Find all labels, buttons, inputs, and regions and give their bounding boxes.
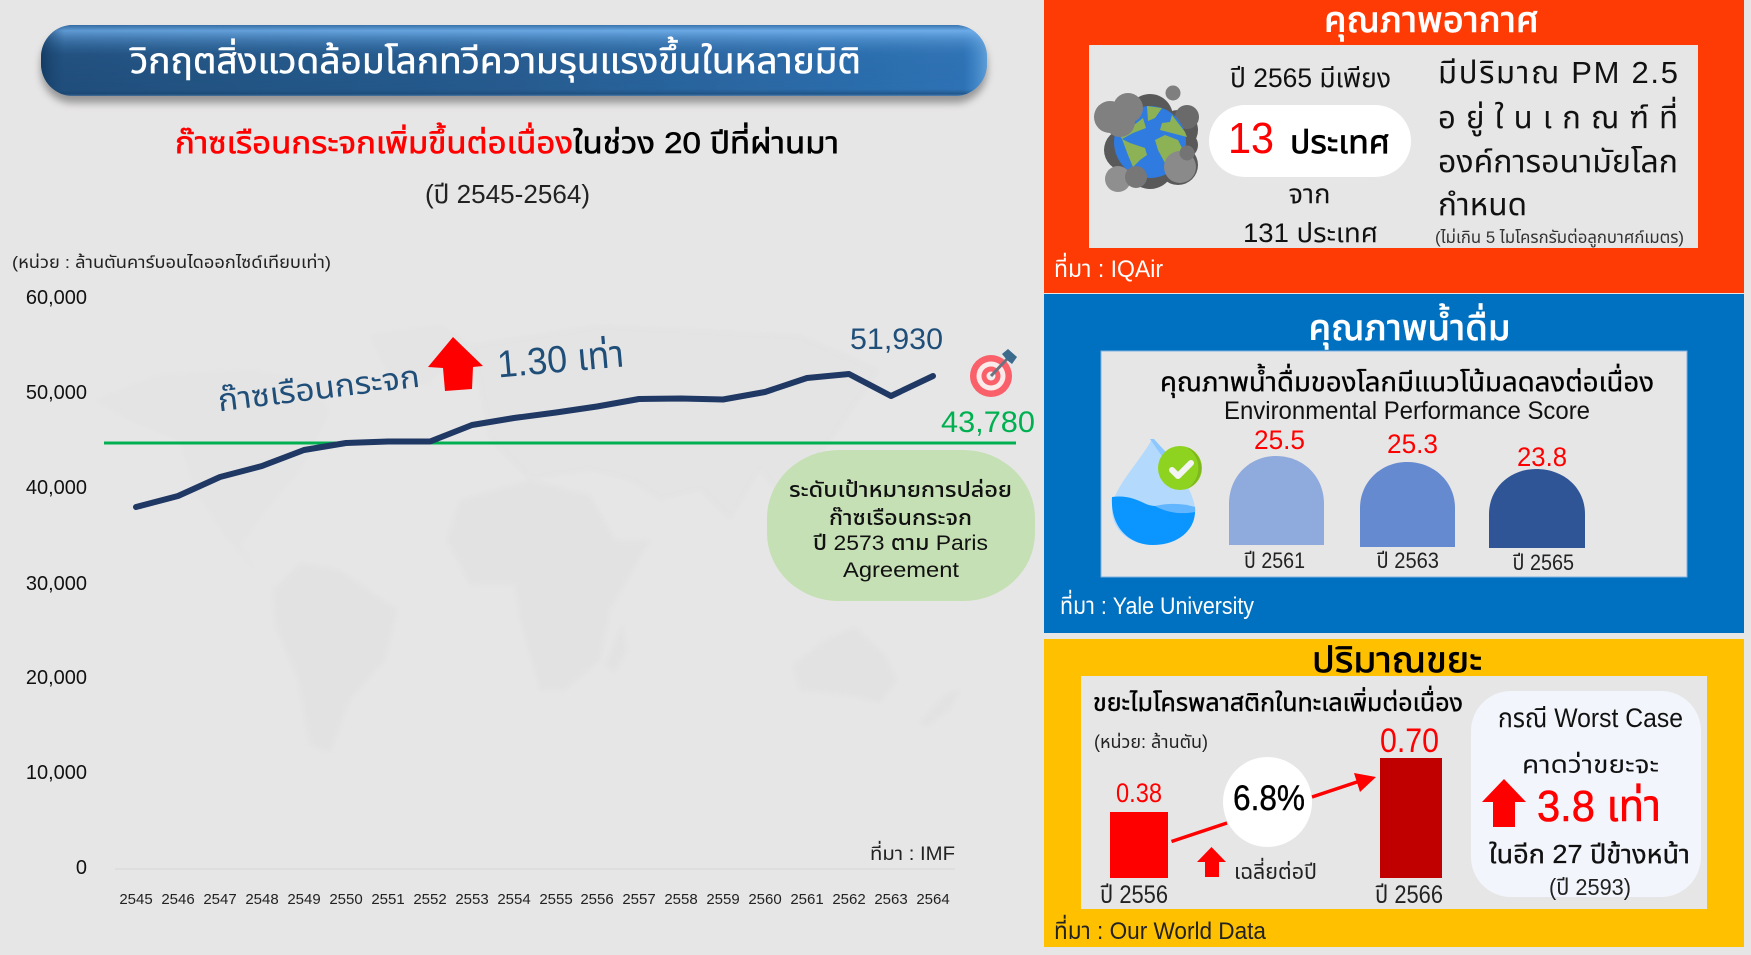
x axis labels: 2558 [664,891,698,908]
annotation: greenhouse gas 1.30 times: ก๊าซเรือนกระจก [216,359,422,418]
bar: 2556 [1100,778,1168,909]
bar: 2563: ปี 2563 [1376,548,1439,573]
text: PM 2.5 standard: มีปริมาณ PM 2.5 [1438,55,1678,90]
x axis labels: 2553 [455,891,489,908]
icon: red up arrow [428,337,483,391]
callout: target level [767,450,1035,601]
text: PM 2.5 standard: อยู่ในเกณฑ์ที่ [1438,96,1678,136]
text: average per year: เฉลี่ยต่อปี [1234,857,1317,884]
text: 13 of 131 countries: 131 ประเทศ [1243,218,1378,248]
x axis labels: 2548 [245,891,279,908]
emissions line [136,374,933,507]
x axis labels: 2559 [706,891,740,908]
x axis labels: 2562 [832,891,866,908]
text: microplastic heading: ขยะไมโครพลาสติกในทะเลเพิ่มต่อเนื่อง [1093,685,1463,717]
text: 13 of 131 countries: ปี 2565 มีเพียง [1230,63,1391,93]
bar: 2566 [1375,722,1443,909]
callout: target level: ก๊าซเรือนกระจก [829,506,972,530]
panel: waste [1044,639,1744,947]
title banner: วิกฤตสิ่งแวดล้อมโลกทวีความรุนแรงขึ้นในหลายมิติ [129,36,861,82]
heading: waste: ปริมาณขยะ [1312,639,1482,680]
y axis labels: 40,000 [26,477,87,499]
panel: worst case: กรณี Worst Case [1498,703,1683,733]
x axis labels: 2564 [916,891,950,908]
title banner [41,25,987,96]
text: 13 of 131 countries: ประเทศ [1290,124,1390,160]
heading: drinking water: คุณภาพน้ำดื่ม [1308,303,1510,349]
x axis labels: 2561 [790,891,824,908]
icon: small up arrow [1197,847,1226,877]
y axis labels: 10,000 [26,762,87,784]
callout: target level: Agreement [843,559,959,582]
callout: 6.8% [1223,757,1312,847]
y axis labels [26,287,87,879]
callout: target level: ปี 2573 ตาม Paris [813,532,988,555]
subheading: ก๊าซเรือนกระจกเพิ่มขึ้นต่อเนื่อง ในช่วง 20 ปีที่ผ่านมา [175,122,839,160]
y axis labels: 20,000 [26,667,87,689]
icon: big up arrow [1482,779,1526,827]
x axis labels: 2560 [748,891,782,908]
bar: 2561: ปี 2561 [1244,548,1305,573]
text: 13 of 131 countries [1209,63,1411,248]
text: water trend heading: คุณภาพน้ำดื่มของโลกมีแนวโน้มลดลงต่อเนื่อง [1160,363,1654,398]
period note: (ปี 2545-2564) [425,179,590,209]
text: unit: (หน่วย: ล้านตัน) [1094,732,1208,752]
value 51,930: 51,930 [850,323,943,356]
x axis labels: 2545 [119,891,153,908]
text: PM 2.5 standard: (ไม่เกิน 5 ไมโครกรัมต่อลูกบาศก์เมตร) [1435,228,1684,249]
x axis labels: 2547 [203,891,237,908]
bar: 2565: ปี 2565 [1512,550,1574,575]
bar: 2556: 0.38 [1116,778,1162,808]
panel: air quality [1044,0,1744,293]
arrow: growth trend [1172,773,1376,842]
panel: worst case: 3.8 เท่า [1537,782,1661,831]
y axis labels: 30,000 [26,573,87,595]
text: PM 2.5 standard: กำหนด [1438,187,1527,222]
text: 13 of 131 countries: จาก [1288,179,1330,209]
x axis labels [119,891,950,908]
heading: air quality: คุณภาพอากาศ [1324,0,1539,41]
bar: 2566: ปี 2566 [1375,881,1443,909]
target line [104,442,1016,444]
bar: 2565 [1489,442,1585,575]
annotation: greenhouse gas 1.30 times: 1.30 เท่า [496,333,626,386]
icon: target [970,349,1017,397]
x axis labels: 2550 [329,891,363,908]
text: PM 2.5 standard: องค์การอนามัยโลก [1438,144,1678,179]
value 43,780: 43,780 [941,406,1035,439]
y axis labels: 0 [76,857,87,879]
bar: 2566: 0.70 [1380,722,1439,760]
x axis labels: 2549 [287,891,321,908]
annotation: greenhouse gas 1.30 times [216,333,626,418]
icon: polluted earth [1094,86,1199,192]
panel: worst case: (ปี 2593) [1549,874,1631,900]
unit label: (หน่วย : ล้านตันคาร์บอนไดออกไซด์เทียบเท่า) [12,252,331,272]
x axis labels: 2557 [622,891,656,908]
line chart [26,287,1035,908]
x axis labels: 2551 [371,891,405,908]
source: Our World Data: ที่มา : Our World Data [1054,914,1267,945]
source: Yale University: ที่มา : Yale University [1060,589,1254,620]
bar: 2561 [1229,425,1324,573]
x axis labels: 2546 [161,891,195,908]
bar: 2563 [1360,429,1455,573]
y axis labels: 50,000 [26,382,87,404]
text: score subtitle: Environmental Performance Score [1224,397,1590,425]
bar: 2561: 25.5 [1254,425,1305,455]
x axis labels: 2556 [580,891,614,908]
bar: 2563: 25.3 [1387,429,1438,459]
x axis labels: 2563 [874,891,908,908]
source: IQAir: ที่มา : IQAir [1054,252,1163,283]
x axis labels: 2554 [497,891,531,908]
panel: worst case: คาดว่าขยะจะ [1522,751,1659,779]
bar: 2565: 23.8 [1517,442,1567,472]
panel: drinking water quality [1044,294,1744,633]
callout: 6.8%: 6.8% [1233,779,1305,818]
text: 13 of 131 countries: 13 [1228,114,1274,163]
icon: water drop with check [1112,439,1202,545]
panel: worst case: ในอีก 27 ปีข้างหน้า [1489,839,1690,869]
y axis labels: 60,000 [26,287,87,309]
callout: target level: ระดับเป้าหมายการปล่อย [789,478,1012,502]
x axis labels: 2552 [413,891,447,908]
text: PM 2.5 standard [1435,55,1684,249]
x axis labels: 2555 [539,891,573,908]
world map watermark [95,325,960,752]
source: IMF: ที่มา : IMF [870,840,955,865]
panel: worst case [1471,691,1701,900]
bar: 2556: ปี 2556 [1100,881,1168,909]
